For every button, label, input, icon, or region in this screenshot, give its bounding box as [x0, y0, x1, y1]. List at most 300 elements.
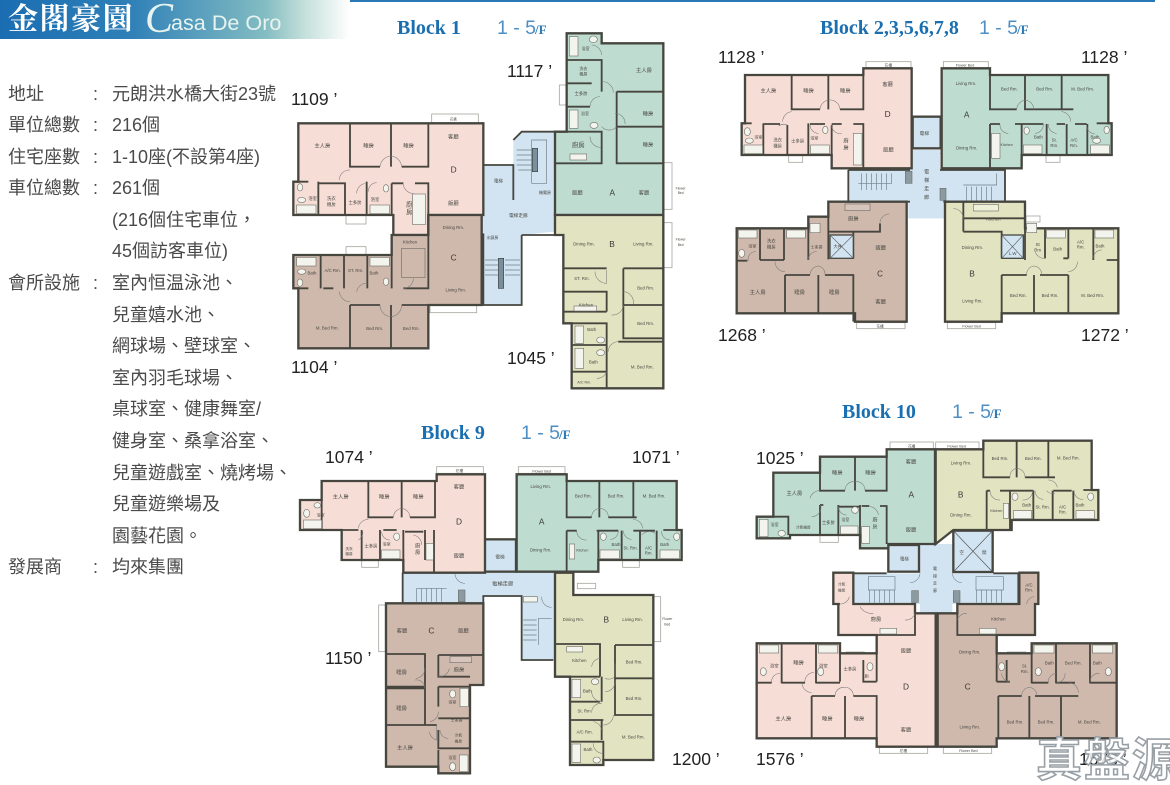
- unit D: 房: [406, 207, 412, 216]
- unit A: 飯廳: [572, 189, 583, 197]
- balconies and flower beds: Flower: [676, 238, 687, 242]
- unit A: St.: [1052, 138, 1057, 143]
- unit C: 士多房: [811, 244, 823, 250]
- unit B: Bed Rm.: [1025, 456, 1042, 461]
- unit B: A/C Rm.: [577, 380, 591, 384]
- unit C: Bath: [1093, 661, 1102, 666]
- unit C: Bath: [1045, 661, 1054, 666]
- unit D: 飯廳: [883, 145, 894, 153]
- core: lifts, stairs and lobby: 水錶房: [486, 234, 498, 240]
- unit C: Bath: [308, 270, 317, 275]
- unit C: C: [877, 270, 883, 279]
- unit C: 浴室: [448, 698, 456, 704]
- unit C: 廚房: [454, 666, 465, 674]
- text block: property facts: 261個: [112, 178, 160, 198]
- balconies: 花槽: [876, 323, 884, 328]
- unit B: St. Rm.: [577, 708, 592, 713]
- unit C: M. Bed Rm.: [316, 325, 339, 330]
- unit D: 睡房: [403, 142, 415, 150]
- unit C: [293, 215, 482, 348]
- unit C: 浴室: [748, 243, 756, 249]
- top rule: [350, 0, 1155, 2]
- unit C: Dining Rm.: [959, 650, 980, 655]
- unit B: [945, 202, 1118, 322]
- unit A: 房: [873, 523, 878, 530]
- area label: unit C Block 9: 1150 ’: [325, 648, 371, 668]
- text block: property facts: :: [93, 147, 98, 167]
- unit A: Bath: [1034, 135, 1043, 140]
- unit C: Bed Rm.: [403, 326, 420, 331]
- unit C: [386, 603, 483, 773]
- unit D: 浴室: [770, 663, 779, 670]
- text block: property facts: 1-10座(不設第4座): [112, 147, 260, 167]
- title: Chinese name: 金閣豪園: [8, 3, 134, 36]
- core: lifts, stairs and lobby: 梯: [933, 572, 937, 578]
- unit A: A/C: [1070, 138, 1078, 143]
- unit C: C: [428, 625, 434, 635]
- unit C: A/C: [1025, 583, 1033, 588]
- area label: unit C Block 1: 1104 ’: [291, 357, 337, 377]
- unit B: Rm: [1034, 247, 1041, 252]
- balconies and flower beds: Flower: [676, 186, 687, 190]
- unit A: Living Rm.: [956, 81, 976, 86]
- unit A: Bath: [660, 542, 670, 547]
- unit B: B: [609, 239, 615, 249]
- unit C: 洗衣: [767, 238, 776, 245]
- text block: property facts: :: [93, 273, 98, 293]
- unit C: 廚房: [848, 215, 859, 223]
- unit C: Bath: [370, 270, 379, 275]
- unit C: A/C Rm.: [324, 268, 341, 273]
- unit D: 士多房: [365, 543, 378, 550]
- balconies and flower beds: Bed: [678, 243, 684, 247]
- text block: property facts: :: [93, 178, 98, 198]
- core: lifts, stairs and lobby: 電梯: [920, 130, 929, 137]
- unit A: 機房: [579, 71, 587, 77]
- text block: property facts: 兒童嬉水池、: [112, 305, 220, 325]
- unit D: 機房: [327, 201, 336, 208]
- unit C: 士多房: [451, 717, 463, 723]
- area label: unit B Block 9: 1200 ’: [672, 749, 720, 769]
- unit B: Bath: [1053, 247, 1063, 252]
- unit D: 廚: [406, 200, 413, 209]
- heading: Block 9: 1 - 5: [521, 422, 560, 444]
- core: lifts, stairs and lobby: 電梯走廊: [492, 580, 514, 588]
- unit B: Living Rm.: [633, 242, 654, 247]
- unit A: Bed Rm.: [1036, 87, 1053, 92]
- unit D: 主人房: [333, 493, 349, 501]
- heading: Block 2,3,5,6,7,8: 1 - 5: [979, 17, 1018, 39]
- unit C: 冷氣: [455, 733, 462, 738]
- text block: property facts: 單位總數: [8, 115, 80, 135]
- heading: Block 10: /F: [989, 406, 1002, 421]
- unit B: A/C Rm.: [576, 729, 593, 734]
- unit D: 浴室: [383, 541, 391, 547]
- unit D: [742, 68, 912, 168]
- unit B: B: [958, 489, 964, 499]
- unit D: 房: [415, 548, 421, 556]
- unit D: 客廳: [454, 483, 465, 491]
- unit D: 睡房: [840, 87, 851, 95]
- unit D: 機房: [773, 143, 783, 150]
- unit A: Rm.: [1070, 143, 1078, 148]
- core: lifts, stairs and lobby: 廊: [933, 587, 937, 593]
- unit D: 浴室: [810, 135, 818, 141]
- core: lifts, stairs and lobby: [853, 531, 1018, 623]
- text block: property facts: 兒童遊樂場及: [112, 494, 220, 514]
- unit C: M. Bed Rm.: [1078, 720, 1101, 725]
- core: lifts, stairs and lobby: 空: [960, 549, 965, 555]
- core: lifts, stairs and lobby: 電梯: [494, 177, 503, 184]
- unit A: [757, 449, 935, 548]
- unit B: Kitchen: [986, 217, 1001, 222]
- unit B: Living Rm.: [622, 617, 643, 622]
- area label: unit A Block 2: 1128 ’: [1081, 47, 1127, 67]
- unit A: [517, 474, 682, 572]
- balconies and flower beds: 花槽: [450, 117, 457, 122]
- unit A: Bed Rm.: [575, 493, 592, 498]
- unit D: D: [903, 682, 909, 692]
- floor plan: Block 9: [300, 467, 682, 773]
- text block: property facts: 兒童遊戲室、燒烤場、: [112, 463, 292, 483]
- unit D: D: [456, 517, 462, 527]
- unit A: 浴室: [771, 521, 779, 527]
- balconies: Bed: [664, 622, 670, 626]
- unit C: Kitchen: [403, 239, 418, 244]
- unit C: 飯廳: [875, 243, 887, 251]
- unit A: Bath: [612, 542, 621, 547]
- balconies: [789, 62, 1060, 329]
- core: lifts, stairs and lobby: 間: [982, 550, 986, 556]
- unit D: 浴室: [754, 134, 762, 140]
- unit C: 客廳: [397, 627, 408, 635]
- unit A: 冷氣機房: [796, 524, 811, 529]
- unit A: Kitchen: [576, 548, 588, 552]
- area label: unit D Block 1: 1109 ’: [291, 89, 337, 109]
- unit A: 廚房: [572, 140, 585, 149]
- unit C: 睡房: [396, 704, 408, 712]
- unit C: Bed Rm.: [1038, 720, 1054, 725]
- unit B: Bath: [1076, 502, 1085, 507]
- unit A: 睡房: [832, 469, 843, 477]
- unit D: 客廳: [448, 132, 459, 140]
- unit D: 機房: [838, 587, 846, 592]
- unit A: Dining Rm.: [956, 145, 977, 150]
- core: lifts, stairs and lobby: [467, 132, 570, 305]
- unit C: ST. Rm.: [348, 268, 363, 273]
- unit C: 主人房: [750, 288, 766, 296]
- heading: Block 10: Block 10: [842, 401, 916, 423]
- balconies: [820, 442, 1026, 753]
- unit B: Bath: [1022, 503, 1032, 508]
- unit D: 士多房: [844, 666, 857, 673]
- heading: Block 1: Block 1: [397, 17, 461, 39]
- heading: Block 9: /F: [558, 427, 571, 442]
- unit A: 客廳: [906, 457, 917, 465]
- unit D: 浴室: [819, 663, 828, 670]
- unit D: 洗衣: [345, 546, 353, 551]
- unit A: 士多房: [575, 90, 588, 97]
- unit D: 主人房: [314, 142, 331, 150]
- unit A: 廚: [873, 517, 878, 524]
- unit A: A: [539, 517, 545, 527]
- unit B: [936, 441, 1098, 544]
- unit D: 飯廳: [901, 646, 912, 654]
- unit C: Bed Rm.: [1065, 661, 1082, 666]
- unit B: Bed Rm.: [1042, 293, 1058, 298]
- unit A: Rm.: [645, 551, 653, 556]
- title: English name: asa De Oro: [171, 10, 281, 35]
- unit D: 睡房: [803, 87, 815, 95]
- balconies: Flower Bed: [962, 324, 981, 328]
- unit D: 浴室: [308, 195, 318, 202]
- text block: property facts: 室內羽毛球場、: [112, 368, 238, 388]
- unit B: Bed Rm.: [1010, 293, 1027, 298]
- unit D: 睡房: [854, 714, 865, 722]
- unit A: Rm.: [1050, 143, 1058, 148]
- unit A: St. Rm.: [623, 545, 638, 550]
- core: lifts, stairs and lobby: 電梯: [900, 556, 909, 563]
- unit B: M. Bed Rm.: [1081, 293, 1104, 298]
- unit B: Bath: [584, 747, 593, 752]
- unit A: A/C: [645, 545, 652, 550]
- text block: property facts: 會所設施: [8, 273, 80, 293]
- core: lifts, stairs and lobby: 走: [924, 186, 929, 192]
- unit B: Bath: [1096, 243, 1105, 248]
- unit C: C: [451, 253, 457, 263]
- heading: Block 10: 1 - 5: [952, 401, 991, 423]
- unit B: Dining Rm.: [962, 245, 983, 250]
- unit D: 客廳: [882, 80, 894, 88]
- area label: unit D Block 2: 1128 ’: [718, 47, 764, 67]
- unit A: Dining Rm.: [530, 547, 551, 552]
- unit A: Bed Rm.: [608, 493, 624, 498]
- text block: property facts: 均來集團: [112, 557, 184, 577]
- unit D: 洗衣: [327, 195, 336, 202]
- heading: Block 1: /F: [534, 22, 547, 37]
- floor plan: Block 10: [757, 441, 1117, 753]
- heading: Block 1: [397, 17, 547, 39]
- core: lifts, stairs and lobby: 電梯: [495, 554, 505, 561]
- core: lifts, stairs and lobby: 機電房: [539, 189, 551, 195]
- unit A: 客廳: [639, 189, 650, 197]
- text block: property facts: 住宅座數: [8, 147, 80, 167]
- unit B: L.W: [1009, 251, 1017, 256]
- area label: unit D Block 10: 1576 ’: [756, 749, 804, 769]
- area label: unit C Block 10: 1578 ’: [1079, 749, 1127, 769]
- core: lifts, stairs and lobby: 電梯走廊: [509, 212, 528, 219]
- unit A: 浴室: [841, 516, 849, 522]
- unit A: 主人房: [786, 489, 803, 497]
- unit D: 睡房: [822, 714, 833, 722]
- unit D: 飯廳: [454, 551, 465, 559]
- unit C: 大井: [833, 243, 843, 250]
- balconies: 花槽: [908, 443, 916, 448]
- unit D: [293, 123, 483, 235]
- unit C: St.: [1022, 664, 1027, 669]
- unit B: [555, 573, 653, 765]
- unit D: 冷氣: [838, 581, 846, 586]
- unit B: St. Rm.: [1035, 504, 1050, 509]
- unit B: Bed Rm.: [626, 659, 642, 664]
- core: lifts, stairs and lobby: [848, 117, 1005, 218]
- unit C: 睡房: [829, 288, 840, 296]
- unit D: 廚: [843, 137, 849, 145]
- unit D: 睡房: [363, 142, 375, 150]
- unit D: 浴室: [317, 511, 325, 517]
- text block: property facts: [8, 84, 292, 577]
- text block: property facts: (216個住宅車位，: [112, 210, 256, 230]
- unit D: 睡房: [379, 493, 390, 501]
- unit C: Bed Rm.: [366, 326, 383, 331]
- unit B: St: [1036, 242, 1041, 247]
- unit A: M. Bed Rm.: [643, 493, 665, 498]
- unit D: 主人房: [775, 714, 792, 722]
- unit D: 機房: [345, 551, 353, 556]
- unit D: 士多房: [791, 138, 805, 145]
- text block: property facts: 車位總數: [8, 178, 80, 198]
- unit A: A: [909, 489, 915, 499]
- core: lifts, stairs and lobby: 廊: [924, 194, 929, 201]
- heading: Block 10: [842, 401, 1002, 423]
- unit B: Bed Rm.: [626, 696, 642, 701]
- unit B: Kitchen: [579, 303, 594, 308]
- unit B: M. Bed Rm.: [1057, 455, 1080, 460]
- floor plan: Block 1: [293, 33, 687, 388]
- unit D: 廚: [415, 541, 421, 549]
- core: lifts, stairs and lobby: 梯: [924, 177, 929, 184]
- heading: Block 9: Block 9: [421, 422, 485, 444]
- unit A: 浴室: [582, 45, 590, 51]
- unit B: Bath: [583, 689, 592, 694]
- area label: unit B Block 1: 1045 ’: [507, 348, 555, 368]
- unit B: Bath: [589, 360, 598, 365]
- unit B: Rm.: [1077, 245, 1085, 250]
- heading: Block 2,3,5,6,7,8: /F: [1016, 22, 1029, 37]
- unit C: 睡房: [396, 668, 408, 676]
- text block: property facts: 網球場、壁球室、: [112, 336, 256, 356]
- unit C: 機房: [767, 244, 776, 251]
- unit B: A/C: [1077, 239, 1084, 244]
- unit B: A/C: [1059, 504, 1066, 509]
- balconies: 花槽: [456, 468, 463, 473]
- unit C: Living Rm.: [445, 288, 466, 293]
- unit A: 飯廳: [906, 525, 917, 533]
- unit D: 睡房: [413, 493, 424, 501]
- unit A: M. Bed Rm.: [1071, 87, 1094, 92]
- unit A: A: [964, 110, 970, 120]
- text block: property facts: 發展商: [8, 557, 62, 577]
- unit A: 士多房: [822, 519, 835, 526]
- balconies and flower beds: [346, 85, 687, 313]
- area label: unit A Block 1: 1117 ’: [507, 61, 552, 81]
- balconies: Flower Bed: [947, 444, 966, 448]
- unit B: M. Bed Rm.: [631, 364, 654, 369]
- unit B: Bath: [587, 327, 597, 332]
- unit A: 洗衣: [579, 65, 587, 71]
- unit D: 客廳: [901, 726, 912, 734]
- unit A: Kitchen: [1001, 143, 1013, 147]
- unit D: 浴室: [371, 196, 380, 203]
- unit D: D: [451, 165, 457, 175]
- core: lifts, stairs and lobby: 電: [933, 566, 937, 571]
- balconies: Flower Bed: [956, 64, 974, 68]
- unit C: 飯廳: [458, 627, 469, 635]
- text block: property facts: :: [93, 557, 98, 577]
- balconies: Flower: [662, 617, 673, 621]
- unit A: 浴室: [581, 110, 589, 116]
- unit B: Dining Rm.: [950, 512, 972, 517]
- unit C: Rm.: [1021, 669, 1029, 674]
- text block: property facts: 216個: [112, 115, 160, 135]
- unit C: Rm.: [1025, 587, 1033, 592]
- unit B: Bed Rm.: [637, 321, 654, 326]
- unit D: 飯廳: [448, 199, 459, 207]
- unit B: [555, 215, 663, 388]
- text block: property facts: 45個訪客車位): [112, 241, 228, 261]
- unit C: [737, 202, 907, 322]
- unit B: Bed Rm.: [992, 456, 1008, 461]
- area label: unit D Block 9: 1074 ’: [325, 447, 373, 467]
- unit C: C: [965, 681, 971, 691]
- text block: property facts: 地址: [8, 84, 44, 104]
- unit C: 浴室: [448, 754, 456, 760]
- balconies: 花槽: [900, 748, 907, 753]
- unit C: 機房: [455, 739, 462, 744]
- unit C: Living Rm.: [959, 724, 980, 729]
- unit C: 主人房: [397, 743, 414, 751]
- text block: property facts: 室內恒温泳池、: [112, 273, 238, 293]
- core: lifts, stairs and lobby: 電: [924, 169, 929, 175]
- balconies: [362, 467, 673, 652]
- floor plan: Block 2,3,5,6,7,8: [737, 62, 1118, 329]
- heading: Block 1: 1 - 5: [497, 17, 536, 39]
- unit A: A: [610, 187, 616, 197]
- unit B: Bed Rm.: [637, 285, 654, 290]
- unit A: Bath: [1091, 135, 1100, 140]
- heading: Block 2,3,5,6,7,8: [820, 17, 1029, 39]
- text block: property facts: 桌球室、健康舞室/: [112, 399, 261, 419]
- unit A: 睡房: [643, 141, 654, 149]
- heading: Block 9: [421, 422, 571, 444]
- area label: unit B Block 2: 1272 ’: [1081, 325, 1129, 345]
- unit D: 洗衣: [773, 137, 783, 144]
- title: English name: [145, 0, 281, 42]
- unit B: Rm.: [1059, 510, 1067, 515]
- unit C: 睡房: [794, 288, 806, 296]
- unit D: 睡房: [793, 659, 805, 667]
- balconies: Flower Bed: [959, 749, 978, 753]
- unit B: M. Bed Rm.: [622, 734, 645, 739]
- unit C: Bed Rm.: [1007, 720, 1023, 725]
- core: lifts, stairs and lobby: 走: [933, 580, 937, 586]
- unit D: 主人房: [760, 87, 777, 95]
- unit D: [300, 474, 485, 573]
- text block: property facts: 健身室、桑拿浴室、: [112, 431, 274, 451]
- unit B: Living Rm.: [951, 461, 971, 466]
- unit A: Bed Rm.: [1001, 87, 1018, 92]
- text block: property facts: :: [93, 84, 98, 104]
- unit D: 廁: [865, 672, 869, 678]
- unit B: Dining Rm.: [563, 617, 584, 622]
- unit C: Kitchen: [991, 616, 1006, 621]
- unit D: 房: [843, 143, 849, 151]
- unit D: D: [885, 109, 891, 119]
- area label: unit A Block 9: 1071 ’: [632, 447, 680, 467]
- unit A: 睡房: [643, 110, 654, 118]
- unit D: [757, 573, 936, 747]
- unit B: B: [604, 614, 610, 624]
